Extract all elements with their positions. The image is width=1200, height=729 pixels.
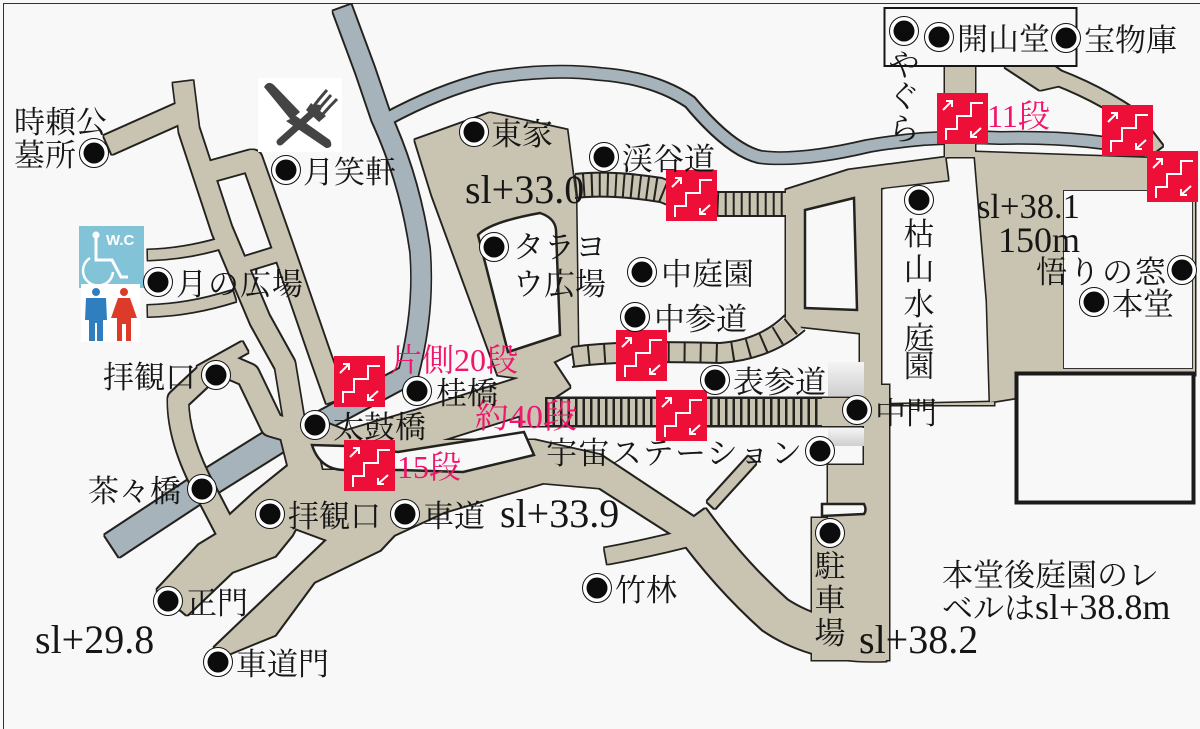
elevation: sl+33.9: sl+33.9	[500, 491, 619, 536]
marker: 宇宙ステーション: 宇宙ステーション	[546, 436, 802, 471]
stair count: 片側20段: 片側20段	[390, 342, 518, 378]
stair count: 11段: 11段	[987, 98, 1050, 134]
marker: やぐら	[888, 16, 920, 147]
marker: 正門	[154, 586, 248, 621]
elevation: sl+38.1 and 150m: sl+38.1	[977, 188, 1080, 226]
marker: やぐら: や	[888, 48, 920, 83]
marker: 正門: 正門	[186, 586, 248, 621]
marker: やぐら: ぐ	[888, 79, 920, 114]
marker: 駐車場: 車	[814, 583, 846, 618]
stair hatching: 中参道	[572, 315, 805, 367]
marker: 本堂	[1080, 287, 1174, 322]
stair icon: 11段	[937, 93, 988, 144]
stair icon: 15段	[344, 440, 395, 491]
marker: 枯山水庭園: 水	[904, 287, 934, 322]
stair icon: 片側20段	[334, 356, 385, 407]
marker: 宝物庫: 宝物庫	[1084, 23, 1177, 58]
white courtyards between roads	[312, 100, 1076, 516]
icon: man and woman	[81, 284, 140, 342]
stair icon: 渓谷道	[666, 170, 717, 221]
marker: 茶々橋: 茶々橋	[88, 474, 181, 509]
marker: タラヨウ広場	[480, 230, 606, 302]
stair count: 15段: 15段	[397, 449, 461, 485]
marker: 桂橋	[402, 376, 498, 411]
marker: 拝観口 lower: 拝観口	[288, 499, 381, 534]
main hall outline	[1064, 190, 1192, 368]
marker: 駐車場	[814, 518, 846, 651]
elevation: sl+38.1 and 150m: 150m	[998, 220, 1080, 260]
marker: 表参道: 表参道	[733, 365, 826, 400]
marker: 竹林	[582, 573, 677, 608]
marker: 月の広場: 月の広場	[176, 267, 303, 302]
marker: 時頼公墓所: 墓所	[14, 138, 76, 173]
開山堂 frame	[884, 8, 1076, 66]
marker: 太鼓橋: 太鼓橋	[333, 410, 426, 445]
stair icon: upper right 1	[1102, 105, 1153, 156]
marker: やぐら: ら	[888, 112, 920, 147]
marker: 東家: 東家	[491, 117, 553, 152]
road network	[108, 67, 1195, 660]
marker: 中門: 中門	[875, 396, 937, 431]
marker: 中門	[842, 396, 937, 431]
stair count: 約40段: 約40段	[475, 398, 577, 436]
icon: accessible toilet: W.C	[106, 232, 134, 249]
marker: 駐車場: 駐	[814, 549, 846, 584]
stair hatching: 表参道	[545, 398, 822, 426]
marker: 開山堂: 開山堂	[957, 22, 1050, 57]
marker: 車道: 車道	[423, 499, 485, 534]
elevation: sl+38.2: sl+38.2	[859, 617, 978, 662]
note: rear garden level: ベルはsl+38.8m	[942, 587, 1170, 627]
marker: 車道門: 車道門	[236, 647, 329, 682]
marker: 時頼公墓所: 時頼公	[14, 105, 107, 140]
marker: 枯山水庭園: 枯	[904, 217, 934, 252]
elevation: sl+38.1 and 150m	[977, 188, 1080, 260]
marker: 枯山水庭園	[904, 186, 934, 384]
elevation: sl+33.0: sl+33.0	[465, 167, 584, 212]
marker: 時頼公墓所	[14, 105, 108, 173]
icon: cutlery	[258, 78, 342, 152]
marker: タラヨウ広場: タラヨ	[513, 230, 606, 265]
stair icon: upper right 2	[1147, 151, 1198, 202]
icon: accessible toilet	[79, 226, 144, 288]
marker: 車道	[390, 499, 485, 534]
marker: 中参道: 中参道	[654, 302, 747, 337]
marker: 竹林: 竹林	[615, 573, 677, 608]
note: rear garden level	[942, 558, 1170, 627]
marker: 拝観口 upper: 拝観口	[103, 360, 196, 395]
marker: 駐車場: 場	[814, 616, 846, 651]
marker: 渓谷道: 渓谷道	[622, 142, 715, 177]
marker: 枯山水庭園: 園	[904, 349, 934, 384]
marker: 枯山水庭園: 庭	[904, 321, 934, 356]
marker: 東家	[460, 117, 553, 152]
grey shaded patches	[828, 362, 864, 446]
river and water channels	[112, 8, 1150, 546]
elevation: sl+29.8: sl+29.8	[35, 617, 154, 662]
marker: 月笑軒: 月笑軒	[303, 155, 396, 190]
marker: タラヨウ広場: ウ広場	[513, 267, 606, 302]
marker: 本堂: 本堂	[1112, 287, 1174, 322]
stair icon: 中参道	[616, 330, 667, 381]
note: rear garden level: 本堂後庭園のレ	[942, 558, 1159, 593]
marker: 枯山水庭園: 山	[904, 252, 934, 287]
stair hatching: 渓谷道	[575, 173, 786, 216]
marker: 桂橋: 桂橋	[436, 376, 498, 411]
marker: 悟りの窓: 悟りの窓	[1036, 255, 1167, 290]
rear garden frame	[1016, 374, 1194, 502]
stair icon: 表参道	[656, 390, 707, 441]
marker: 中庭園: 中庭園	[661, 257, 754, 292]
